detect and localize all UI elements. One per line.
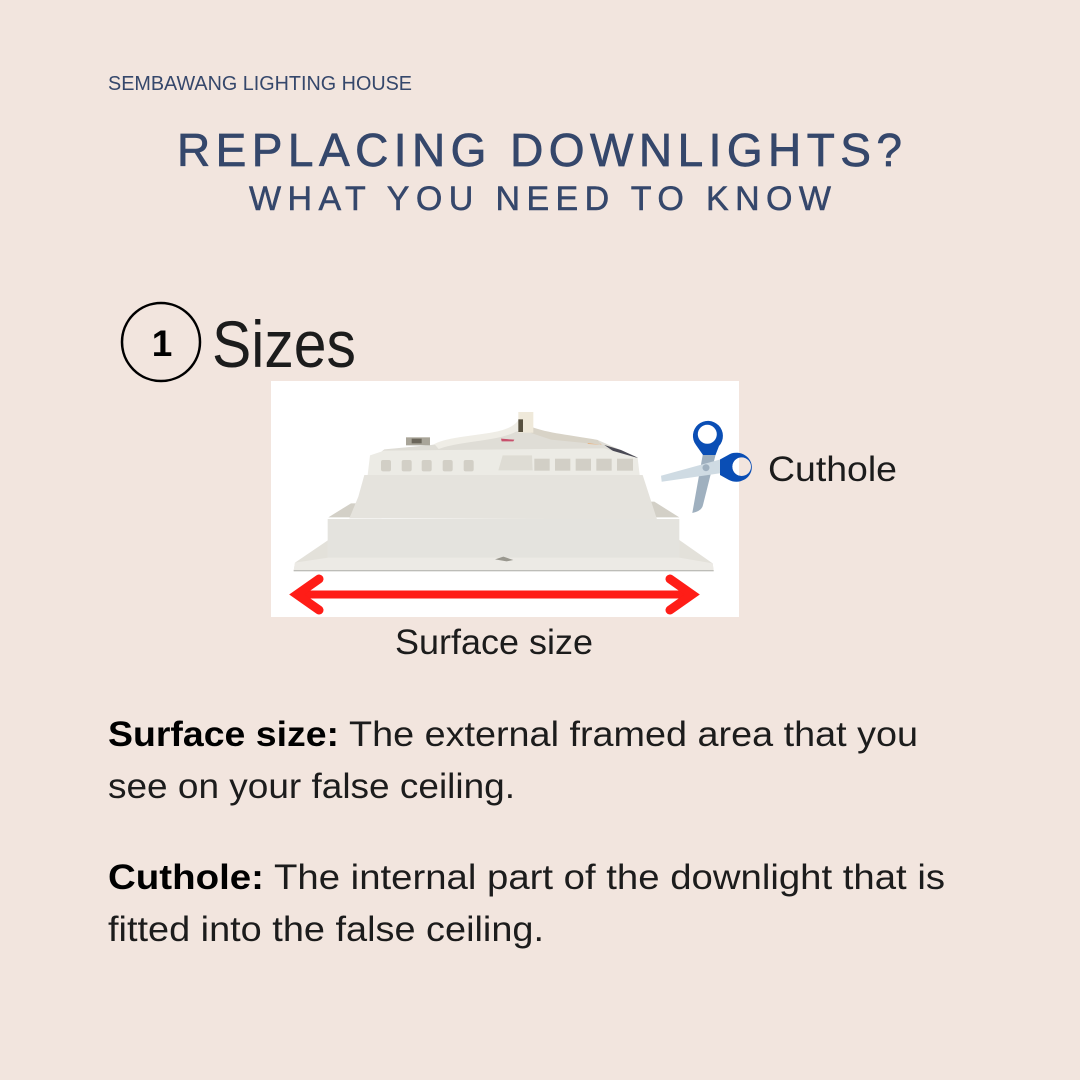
section number badge: 1 <box>152 323 172 364</box>
definition: cuthole: fitted into the false ceiling. <box>108 910 544 949</box>
section number badge <box>122 303 200 381</box>
rear rim <box>328 502 679 517</box>
title: REPLACING DOWNLIGHTS? <box>177 124 902 176</box>
subtitle: WHAT YOU NEED TO KNOW <box>249 180 831 218</box>
definition: surface size: The external framed area that you <box>349 715 918 754</box>
brand name: SEMBAWANG LIGHTING HOUSE <box>108 73 412 95</box>
infographic canvas <box>108 76 944 948</box>
back components <box>371 430 638 460</box>
section heading: Sizes <box>212 307 356 381</box>
definition: surface size: Surface size: <box>108 715 339 754</box>
definition: surface size <box>108 715 918 806</box>
flange front edge <box>294 558 714 571</box>
label: cuthole: Cuthole <box>768 450 897 489</box>
definition: cuthole <box>108 858 945 949</box>
red double-headed arrow: surface size <box>297 579 692 610</box>
definition: surface size: see on your false ceiling. <box>108 767 515 806</box>
ribbed upper band <box>368 448 640 475</box>
tapered body <box>349 475 657 519</box>
flange <box>294 540 714 571</box>
downlight photo panel <box>271 381 739 617</box>
definition: cuthole: Cuthole: <box>108 858 264 897</box>
definition: cuthole: The internal part of the downlight that is <box>274 858 945 897</box>
icon: scissors <box>661 421 752 513</box>
downlight side view illustration <box>294 412 714 571</box>
label: surface size: Surface size <box>395 623 593 662</box>
front box <box>328 519 679 558</box>
